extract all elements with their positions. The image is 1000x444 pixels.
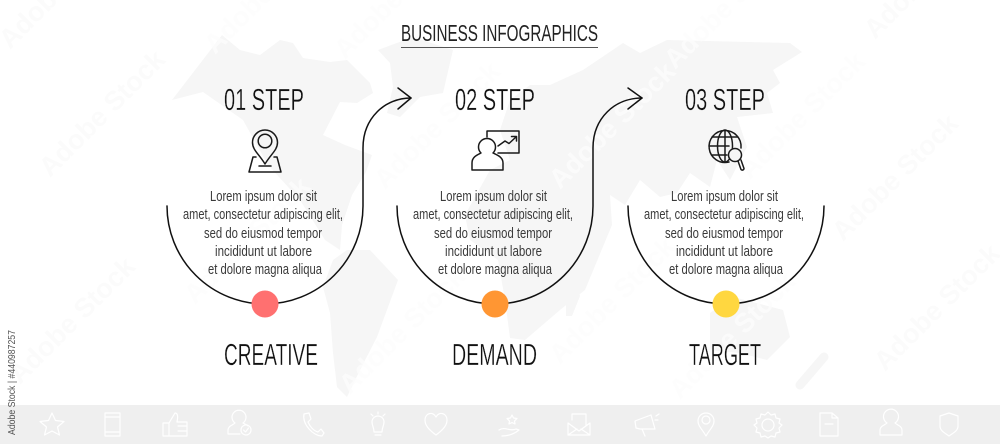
step 3 description: incididunt ut labore xyxy=(676,244,773,260)
watermark layer over map: Adobe Stock xyxy=(333,261,472,399)
step 2 description: amet, consectetur adipiscing elit, xyxy=(413,207,573,223)
icon: gear xyxy=(754,412,782,438)
watermark layer over map: Adobe Stock xyxy=(663,266,802,404)
step 2 description: sed do eiusmod tempor xyxy=(434,226,552,242)
connector line with arrows xyxy=(167,88,824,304)
icon: tablet xyxy=(105,413,120,436)
icon: map pin xyxy=(249,130,281,172)
step 1 description xyxy=(183,189,343,278)
watermark layer over map: Adobe Stock xyxy=(178,171,317,309)
icon: globe with magnifier xyxy=(709,130,744,170)
dot: yellow xyxy=(712,290,740,318)
step 1 description: amet, consectetur adipiscing elit, xyxy=(183,207,343,223)
icon: check badge xyxy=(241,425,251,435)
title: BUSINESS INFOGRAPHICS xyxy=(401,20,598,46)
watermark layer over map: Adobe Stock xyxy=(543,56,682,194)
watermark layer on white background: Adobe Stock xyxy=(663,266,802,404)
step 1 description: et dolore magna aliqua xyxy=(208,262,323,278)
icon: star xyxy=(40,413,64,435)
bottom icon band xyxy=(0,405,1000,444)
icon: document xyxy=(820,413,838,436)
icon: phone xyxy=(304,413,324,436)
step 1 xyxy=(183,82,343,372)
step 2 heading: 02 STEP xyxy=(455,82,535,117)
icon: heart xyxy=(425,413,447,435)
watermark layer on white background: Adobe Stock xyxy=(733,46,872,184)
step 3 description: amet, consectetur adipiscing elit, xyxy=(644,207,804,223)
watermark layer on white background: Adobe Stock xyxy=(178,171,317,309)
step 3 heading: 03 STEP xyxy=(685,82,765,117)
icon: light bulb xyxy=(371,412,385,435)
step 2 xyxy=(413,82,573,372)
watermark layer on white background: Adobe Stock xyxy=(3,251,142,389)
label: creative: CREATIVE xyxy=(224,337,318,372)
icon: megaphone xyxy=(635,414,659,436)
label: target: TARGET xyxy=(689,337,761,372)
dot: red xyxy=(252,290,278,318)
watermark layer on white background: Adobe Stock xyxy=(543,231,682,369)
watermark layer over map xyxy=(178,0,872,404)
vertical stock id: Adobe Stock | #440987257 xyxy=(6,330,18,435)
icon: hand with star xyxy=(499,415,519,436)
watermark layer over map: Adobe Stock xyxy=(368,56,507,194)
watermark layer over map: Adobe Stock xyxy=(733,46,872,184)
icon: user check xyxy=(228,410,248,434)
step 2 description xyxy=(413,189,573,278)
step 1 description: sed do eiusmod tempor xyxy=(204,226,322,242)
icon: envelope xyxy=(568,414,590,435)
step 1 heading: 01 STEP xyxy=(224,82,304,117)
icon: presenter with chart xyxy=(472,131,519,170)
step 2 description: et dolore magna aliqua xyxy=(438,262,553,278)
dot: orange xyxy=(482,290,508,318)
step 3 xyxy=(644,82,804,372)
step 2 description: Lorem ipsum dolor sit xyxy=(440,189,547,205)
step 2 description: incididunt ut labore xyxy=(445,244,542,260)
label: demand: DEMAND xyxy=(452,337,537,372)
watermark layer on white background: Adobe Stock xyxy=(333,261,472,399)
world map background xyxy=(172,35,824,397)
icon: location pin xyxy=(698,413,714,436)
step 1 description: Lorem ipsum dolor sit xyxy=(210,189,317,205)
watermark layer on white background: Adobe Stock xyxy=(33,44,172,182)
step 1 description: incididunt ut labore xyxy=(215,244,312,260)
step 3 description: Lorem ipsum dolor sit xyxy=(671,189,778,205)
watermark layer over map: Adobe Stock xyxy=(543,231,682,369)
icon: shield xyxy=(940,413,958,436)
watermark layer on white background: Adobe Stock xyxy=(368,56,507,194)
icon: thumbs up xyxy=(163,413,187,436)
icon: person xyxy=(880,409,902,435)
step 3 description: sed do eiusmod tempor xyxy=(665,226,783,242)
step 3 description: et dolore magna aliqua xyxy=(669,262,784,278)
watermark layer on white background: Adobe Stock xyxy=(826,108,965,246)
step 3 description xyxy=(644,189,804,278)
